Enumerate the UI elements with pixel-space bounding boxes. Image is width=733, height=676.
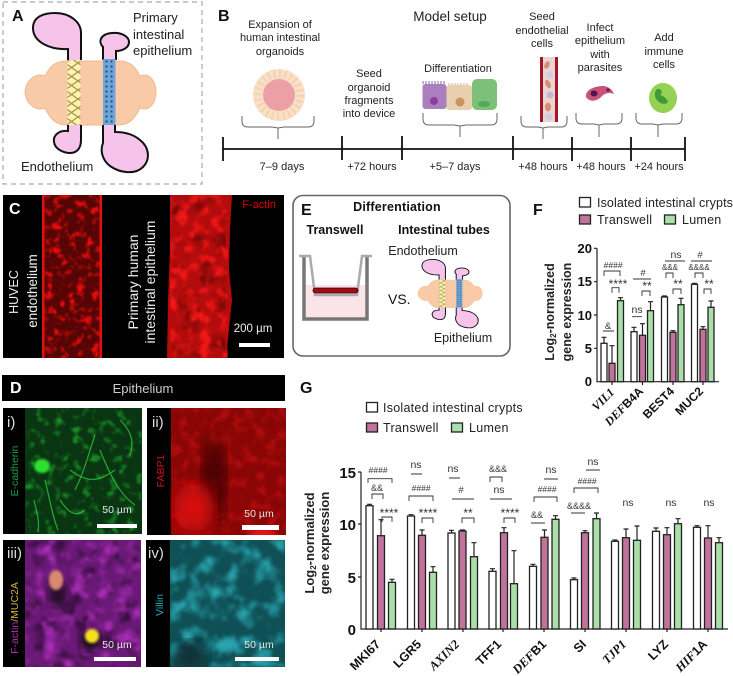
panel G: gene expression chart <box>300 380 728 676</box>
timeline durations: +72 hours <box>347 161 397 173</box>
significance marks F: &&&& <box>688 263 710 272</box>
panel letter C: C <box>9 201 21 218</box>
icon: organoid <box>253 69 305 121</box>
step text: add immune: Add <box>654 32 674 44</box>
image iv: Villin: iv) <box>148 545 164 562</box>
significance marks G: && <box>531 510 543 520</box>
significance marks G: &&&& <box>567 501 591 511</box>
image ii: FABP1: 50 µm <box>244 508 274 520</box>
bars MKI67 <box>366 504 396 629</box>
panel letter F: F <box>533 202 543 219</box>
step text: seed fragments: fragments <box>345 95 394 107</box>
timeline durations: +48 hours <box>518 161 568 173</box>
image i: E-cadherin: E-cadherin <box>9 445 21 496</box>
axis numbers <box>578 241 592 389</box>
label: HUVEC endothelium: Primary human <box>125 235 141 329</box>
scale bar 200 um <box>234 323 272 347</box>
step text: infect: with <box>589 49 610 61</box>
label: HUVEC endothelium <box>7 221 158 343</box>
significance marks F: ** <box>642 279 652 293</box>
panel C: F-actin micrograph <box>3 195 284 358</box>
panel letter E: E <box>301 202 312 219</box>
bars MUC2 <box>692 283 714 382</box>
significance marks G <box>368 456 715 523</box>
significance marks F: & <box>605 321 612 332</box>
significance marks G: **** <box>501 506 520 520</box>
epithelium tube image <box>167 195 232 358</box>
icon: parasite <box>586 86 614 101</box>
axis numbers: 15 <box>339 465 356 482</box>
legend F: Transwell <box>597 213 652 227</box>
step text: seed fragments: into device <box>343 108 395 120</box>
bars LGR5 <box>408 515 436 629</box>
significance marks F <box>603 249 714 332</box>
y axis title <box>302 492 332 594</box>
label: primary intestinal epithelium: Primary <box>133 10 178 25</box>
significance marks G: #### <box>369 465 388 475</box>
bars HIF1A <box>694 526 722 629</box>
label: endothelium: Endothelium <box>388 244 458 258</box>
icon: epithelial cells <box>422 79 497 110</box>
x labels F <box>589 384 706 429</box>
label: HUVEC endothelium: endothelium <box>25 254 40 328</box>
bars AXIN2 <box>448 530 478 629</box>
heading: differentiation: Differentiation <box>353 200 441 214</box>
header bar: D <box>10 380 22 397</box>
image ii: FABP1: ii) <box>152 414 164 431</box>
y axis title: gene expression <box>317 492 332 594</box>
x labels F: VIL1 <box>589 385 617 414</box>
timeline durations: +5–7 days <box>429 161 481 173</box>
x labels G: AXIN2 <box>425 637 462 674</box>
timeline axis <box>223 136 685 161</box>
legend F: Lumen <box>682 213 721 227</box>
x labels G: LGR5 <box>391 637 424 671</box>
mini device diagram <box>418 259 482 328</box>
x labels G: SI <box>571 637 589 655</box>
x labels F: MUC2 <box>672 384 706 418</box>
significance marks G: #### <box>412 483 431 493</box>
step text: seed endothelial: Seed <box>529 11 555 23</box>
scale bar 200 um: 200 µm <box>234 323 272 335</box>
x labels G: LYZ <box>645 637 671 663</box>
step text: seed endothelial: endothelial <box>515 25 569 37</box>
significance marks G: ns <box>622 497 634 509</box>
panel E: differentiation comparison <box>293 196 510 356</box>
timeline durations: 7–9 days <box>260 161 305 173</box>
y axis title: Log <box>302 570 317 594</box>
axis numbers <box>339 465 356 639</box>
axis numbers: 5 <box>348 570 356 587</box>
header bar <box>2 375 285 401</box>
panel letter B: B <box>218 8 230 25</box>
image i: E-cadherin: i) <box>7 414 15 431</box>
x labels G: TJP1 <box>600 637 629 667</box>
image iv: Villin: Villin <box>154 594 166 616</box>
significance marks G: **** <box>419 506 438 520</box>
label: F-actin: F-actin <box>242 199 276 211</box>
label: HUVEC endothelium: intestinal epithelium <box>142 221 158 343</box>
significance marks G: ns <box>587 456 599 468</box>
significance marks G: # <box>458 485 464 496</box>
bars LYZ <box>652 519 682 629</box>
x labels F: DEFB4A <box>601 384 646 429</box>
heading: model setup: Model setup <box>413 9 487 24</box>
significance marks G: &&& <box>489 464 507 474</box>
image iii: F-actin/MUC2A: iii) <box>7 545 22 562</box>
step text: differentiation: Differentiation <box>424 63 492 75</box>
significance marks F: # <box>697 250 703 261</box>
axis numbers: 0 <box>348 622 356 639</box>
label: endothelium: Endothelium <box>21 159 93 174</box>
axes <box>358 472 728 632</box>
panel A: device schematic <box>3 2 202 184</box>
step text: seed fragments: Seed <box>356 68 382 80</box>
legend G: Isolated intestinal crypts <box>383 401 523 415</box>
image i: E-cadherin <box>3 408 142 534</box>
timeline brackets <box>242 113 682 139</box>
significance marks G: ns <box>545 464 557 476</box>
image iv: Villin <box>146 540 285 669</box>
panel F: gene expression chart <box>533 196 733 429</box>
bars SI <box>570 513 600 629</box>
icon: immune cell <box>649 83 677 113</box>
x labels G: MKI67 <box>347 637 383 673</box>
panel letter A: A <box>12 8 24 25</box>
step text: expansion: Expansion of <box>248 19 313 31</box>
step text: expansion: human intestinal <box>240 32 320 44</box>
y axis title: 2 <box>549 333 558 338</box>
y axis title: -normalized <box>543 263 557 333</box>
step text: add immune: immune <box>644 46 684 58</box>
significance marks F: **** <box>609 277 628 291</box>
y axis title: Log <box>543 338 557 361</box>
significance marks F: ** <box>704 277 714 291</box>
significance marks G: #### <box>538 484 557 494</box>
icon: transwell insert <box>299 256 372 319</box>
significance marks F: ns <box>670 249 682 261</box>
step text: infect: epithelium <box>575 35 625 47</box>
y axis title: -normalized <box>302 492 317 565</box>
step text: infect: parasites <box>578 62 623 74</box>
timeline durations <box>260 161 684 173</box>
label: epithelium: Epithelium <box>434 331 492 345</box>
significance marks G: && <box>371 483 383 493</box>
significance marks F: # <box>640 268 646 279</box>
significance marks G: ns <box>447 463 459 475</box>
axis numbers: 15 <box>578 274 592 289</box>
step text: infect: Infect <box>587 22 613 34</box>
image ii: FABP1 <box>147 408 286 543</box>
bars TFF1 <box>489 528 518 629</box>
significance marks G: #### <box>578 476 597 486</box>
axis numbers: 0 <box>585 374 592 389</box>
bars BEST4 <box>662 296 684 382</box>
significance marks F: ** <box>673 277 683 291</box>
heading: transwell: Transwell <box>307 223 363 237</box>
timeline durations: +24 hours <box>634 161 684 173</box>
x labels G: DEFB1 <box>509 637 549 676</box>
step text: add immune: cells <box>653 59 675 71</box>
image iii: F-actin/MUC2A: 50 µm <box>102 639 132 651</box>
x labels G <box>347 637 710 676</box>
legend G <box>366 401 523 435</box>
panel D: epithelium micrographs <box>2 375 286 669</box>
axis numbers: 10 <box>339 517 356 534</box>
panel letter G: G <box>300 380 312 397</box>
x labels G: TFF1 <box>473 637 504 668</box>
image iv: Villin: 50 µm <box>244 639 274 651</box>
significance marks F: ns <box>631 304 643 316</box>
microfluidic device diagram <box>25 13 156 172</box>
significance marks F: &&& <box>662 263 679 272</box>
x labels F: BEST4 <box>640 384 677 421</box>
label: primary intestinal epithelium: epithelium <box>133 43 192 58</box>
image iii: F-actin/MUC2A: F-actin/MUC2A <box>9 582 21 654</box>
axes <box>594 248 719 385</box>
significance marks G: ns <box>665 497 677 509</box>
step text: seed endothelial: cells <box>531 38 553 50</box>
label: primary intestinal epithelium: intestinal <box>133 27 184 42</box>
image iii: F-actin/MUC2A <box>3 540 141 667</box>
bars TJP1 <box>612 526 640 629</box>
image i: E-cadherin: 50 µm <box>102 504 132 516</box>
significance marks G: ns <box>703 497 715 509</box>
legend F: Isolated intestinal crypts <box>597 196 733 210</box>
significance marks G: ns <box>410 459 422 471</box>
icon: blood vessel <box>540 57 558 122</box>
x labels G: HIF1A <box>672 637 710 675</box>
legend F <box>580 196 733 227</box>
bars VIL1 <box>601 298 624 382</box>
label: HUVEC endothelium: HUVEC <box>7 270 21 314</box>
label: vs: VS. <box>388 291 411 307</box>
y axis title: 2 <box>309 565 318 570</box>
y axis title: gene expression <box>560 263 574 361</box>
significance marks G: ns <box>493 484 505 496</box>
significance marks G: **** <box>380 506 399 520</box>
axis numbers: 20 <box>578 241 592 256</box>
significance marks G: ** <box>463 506 473 520</box>
legend G: Lumen <box>469 421 509 435</box>
step text: seed fragments: organoid <box>348 82 390 94</box>
bars DEFB4A <box>631 302 654 382</box>
y axis title <box>543 263 574 361</box>
significance marks F: #### <box>604 260 623 270</box>
header bar: Epithelium <box>113 381 173 396</box>
panel B: model setup timeline <box>218 8 685 173</box>
heading: intestinal tubes: Intestinal tubes <box>398 223 490 237</box>
axis numbers: 10 <box>578 308 592 323</box>
timeline durations: +48 hours <box>576 161 626 173</box>
axis numbers: 5 <box>585 341 592 356</box>
image ii: FABP1: FABP1 <box>155 454 167 487</box>
bars DEFB1 <box>530 516 559 629</box>
step text: expansion: organoids <box>256 46 305 58</box>
endothelium tube image <box>42 195 102 358</box>
legend G: Transwell <box>383 421 439 435</box>
